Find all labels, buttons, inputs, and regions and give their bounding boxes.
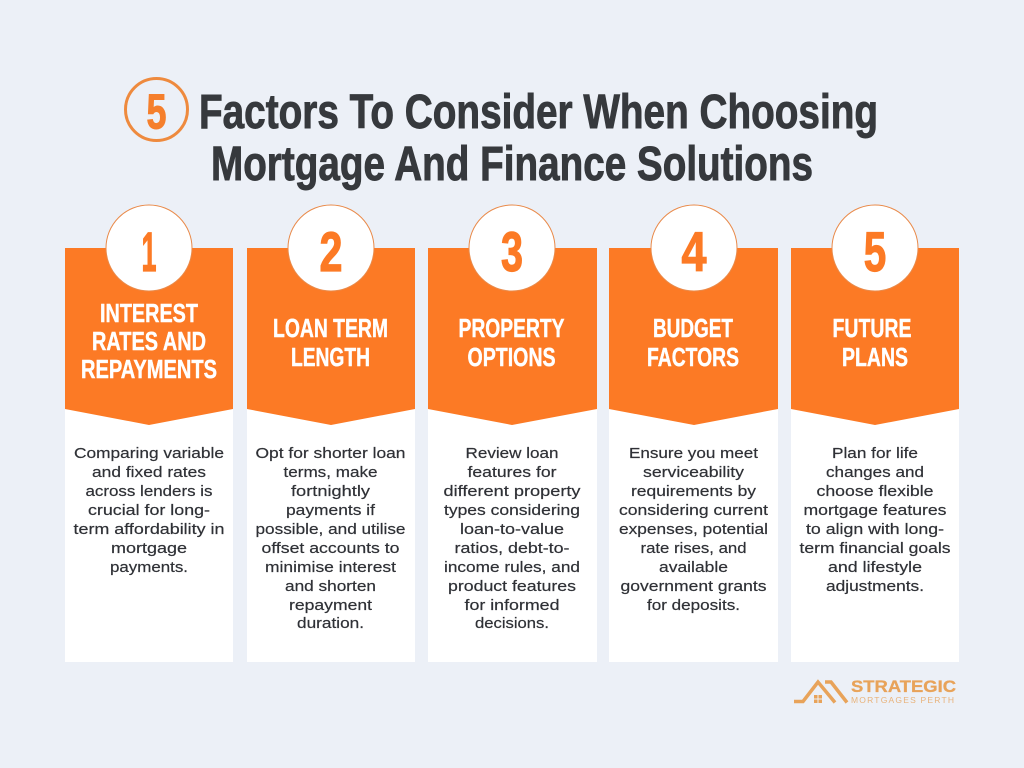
card body text: available [659,559,728,576]
card body text: term financial goals [800,540,950,557]
number badge 1: 1 [142,220,156,283]
card heading: PROPERTY [458,313,564,343]
card body text: decisions. [475,615,549,632]
card body text: repayment [289,597,373,614]
card body text: choose flexible [816,483,934,500]
icon: house roof [794,682,847,703]
card body text: types considering [444,502,580,519]
icon: numeral 5 in ring [126,78,188,140]
card heading [273,313,388,372]
card body text: requirements by [631,483,757,500]
card heading [81,298,217,384]
number badge 2 [288,205,374,291]
title [126,78,878,191]
number badge 5: 5 [864,220,886,283]
card body text: and shorten [285,578,376,595]
number badge 3 [469,205,555,291]
number badge 3: 3 [501,220,523,283]
card body text: product features [448,578,576,595]
heading text: Factors To Consider When Choosing [199,86,878,139]
card heading [458,313,564,372]
card body text: and fixed rates [92,464,206,481]
card heading: PLANS [842,342,908,372]
card body text: mortgage [111,540,187,557]
logo wordmark: STRATEGIC [851,677,956,696]
card heading: REPAYMENTS [81,354,217,384]
icon: numeral 5 in ring: 5 [146,86,166,140]
heading text: Mortgage And Finance Solutions [211,138,813,191]
number badge 4 [651,205,737,291]
logo: Strategic Mortgages Perth [794,677,956,705]
card body text: expenses, potential [619,521,768,538]
card heading: FUTURE [832,313,912,343]
card body text: Ensure you meet [629,445,759,462]
panel: loan term length [247,205,415,662]
card body text: different property [444,483,581,500]
card heading: BUDGET [653,313,733,343]
card body text: Comparing variable [74,445,224,462]
card body text: and lifestyle [828,559,922,576]
card body text: government grants [620,578,766,595]
card body text: to align with long- [806,521,944,538]
card body text: serviceability [643,464,745,481]
number badge 5 [832,205,918,291]
card body text: duration. [297,615,364,632]
panel: property options [428,205,597,662]
card body text: income rules, and [444,559,580,576]
logo wordmark: MORTGAGES PERTH [851,695,954,705]
panel: budget factors [609,205,778,662]
card body text: Review loan [466,445,558,462]
card body text [256,445,406,632]
card body text: features for [468,464,557,481]
card heading: LOAN TERM [273,313,388,343]
card heading: LENGTH [291,342,370,372]
card body text: adjustments. [826,578,924,595]
card body text: considering current [619,502,769,519]
card body text: for informed [464,597,560,614]
panel: interest rates and repayments [65,205,233,662]
card heading [647,313,739,372]
panel: future plans [791,205,959,662]
card body text: terms, make [284,464,378,481]
heading text [199,86,878,191]
card body text [74,445,224,576]
card body text: Plan for life [832,445,918,462]
card body text: possible, and utilise [256,521,406,538]
card body text: for deposits. [647,597,740,614]
card body text [619,445,769,614]
card heading: OPTIONS [468,342,556,372]
card body text: Opt for shorter loan [256,445,406,462]
card body text: term affordability in [74,521,224,538]
card body text: crucial for long- [88,502,210,519]
card body text: ratios, debt-to- [454,540,570,557]
card body text [444,445,581,632]
card body text: payments if [286,502,376,519]
card body text: mortgage features [804,502,946,519]
card body text [800,445,950,595]
card heading: FACTORS [647,342,739,372]
number badge 1 [106,205,192,291]
card body text: rate rises, and [640,540,746,557]
card body text: loan-to-value [460,521,564,538]
card heading: RATES AND [92,326,206,356]
logo wordmark [851,677,956,705]
card body text: offset accounts to [262,540,400,557]
card heading: INTEREST [100,298,198,328]
card heading [832,313,912,372]
card body text: changes and [826,464,924,481]
card body text: across lenders is [86,483,212,500]
number badge 2: 2 [320,220,342,283]
number badge 4: 4 [682,220,706,283]
card body text: payments. [110,559,188,576]
card body text: fortnightly [291,483,371,500]
card body text: minimise interest [265,559,397,576]
